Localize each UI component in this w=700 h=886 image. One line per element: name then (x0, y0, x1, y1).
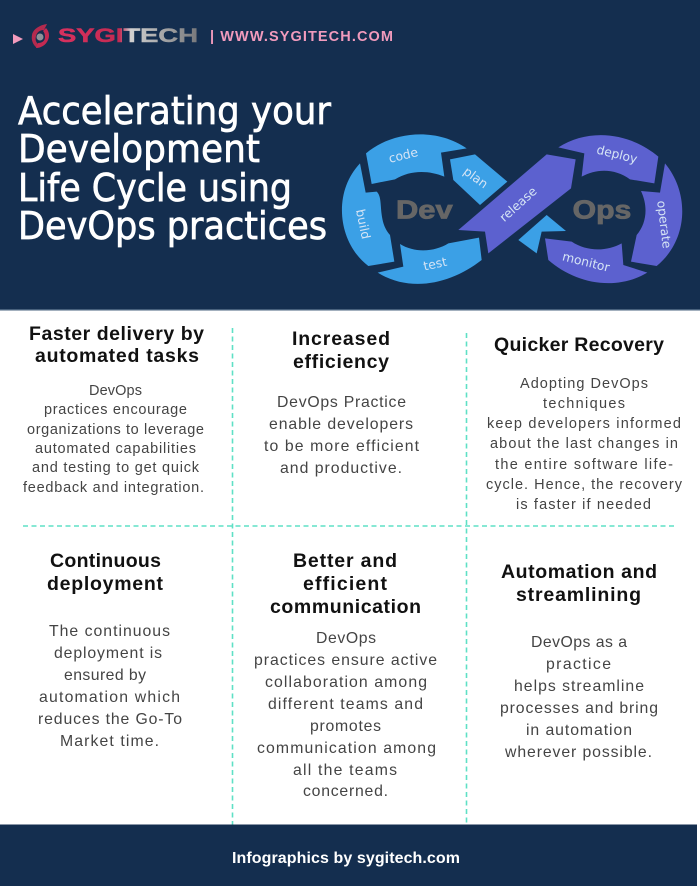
segment: build: build (353, 208, 373, 240)
DevOps infinity diagram (342, 134, 682, 284)
brand bar (13, 24, 393, 48)
panel: automation and streamlining (500, 561, 658, 761)
title: Accelerating your (18, 89, 331, 133)
logo wordmark: SYGITECH (58, 25, 198, 47)
body text: processes and bring (500, 700, 658, 717)
heading: Faster delivery by (29, 323, 204, 345)
heading: automated tasks (35, 345, 199, 367)
body text (23, 383, 204, 496)
heading (29, 323, 204, 367)
panel: better communication (254, 550, 437, 800)
title: Life Cycle using (18, 166, 292, 210)
body text: collaboration among (265, 674, 427, 691)
body text: is faster if needed (516, 497, 651, 513)
grid dividers (23, 328, 676, 825)
panel: quicker recovery (486, 334, 683, 513)
heading: Better and (293, 550, 397, 572)
heading: efficient (303, 573, 388, 595)
body text: ensured by (64, 667, 146, 684)
heading: Automation and (501, 561, 657, 583)
body text: practice (546, 656, 611, 673)
body text: all the teams (293, 762, 397, 779)
segment: plan (450, 154, 507, 205)
heading (270, 550, 421, 618)
title: Development (18, 127, 260, 171)
segment: monitor: monitor (561, 249, 612, 275)
body text: enable developers (269, 416, 413, 433)
body text: and testing to get quick (32, 460, 200, 476)
segment: monitor (545, 238, 647, 283)
body text: DevOps Practice (277, 394, 406, 411)
heading (47, 550, 164, 595)
body text: Market time. (60, 733, 159, 750)
heading: Quicker Recovery (494, 334, 664, 356)
body text: concerned. (303, 783, 388, 800)
body text (38, 623, 182, 750)
body text: about the last changes in (490, 436, 678, 452)
body text: The continuous (49, 623, 170, 640)
panel: faster delivery (23, 323, 204, 496)
body text: organizations to leverage (27, 422, 204, 438)
title: DevOps practices (18, 204, 327, 248)
segment: release arrow (458, 154, 576, 253)
website url: | WWW.SYGITECH.COM (210, 29, 393, 45)
body text (264, 394, 420, 477)
body text: DevOps (316, 630, 376, 647)
header panel (0, 0, 700, 310)
segment: return arrowhead (518, 215, 566, 253)
body text: different teams and (268, 696, 423, 713)
segment: plan: plan (461, 164, 491, 191)
body text: communication among (257, 740, 436, 757)
body text: practices encourage (44, 402, 187, 418)
body text: in automation (526, 722, 632, 739)
body text: automated capabilities (35, 441, 196, 457)
body text: wherever possible. (504, 744, 652, 761)
segment: operate: operate (654, 200, 674, 249)
body text (500, 634, 658, 761)
body text: techniques (543, 396, 625, 412)
icon: logo swirl (32, 24, 49, 48)
heading: Increased (292, 328, 390, 350)
panel: continuous deployment (38, 550, 182, 750)
body text: feedback and integration. (23, 480, 204, 496)
body text: Adopting DevOps (520, 376, 648, 392)
segment: test: test (422, 255, 448, 273)
body text: keep developers informed (487, 416, 681, 432)
body text: practices ensure active (254, 652, 437, 669)
body text: helps streamline (514, 678, 644, 695)
segment: code: code (387, 145, 419, 166)
body text: the entire software life- (495, 457, 673, 473)
icon: pink triangle (13, 34, 23, 44)
footer text: Infographics by sygitech.com (232, 850, 460, 867)
body text: deployment is (54, 645, 162, 662)
segment: code (366, 134, 467, 184)
label: Ops: Ops (573, 194, 631, 224)
heading: communication (270, 596, 421, 618)
segment: deploy (558, 135, 658, 183)
body text: promotes (310, 718, 381, 735)
segment: deploy: deploy (595, 143, 639, 166)
title (18, 89, 331, 248)
segment: test (378, 238, 482, 284)
heading: Continuous (50, 550, 161, 572)
body text: cycle. Hence, the recovery (486, 477, 683, 493)
footer (0, 824, 697, 886)
body text: reduces the Go-To (38, 711, 182, 728)
body text: DevOps as a (531, 634, 627, 651)
segment: build (342, 163, 394, 266)
heading (501, 561, 657, 606)
segment: operate (631, 163, 682, 266)
segment: release arrow: release (497, 184, 540, 225)
body text (486, 376, 683, 513)
heading: deployment (47, 573, 164, 595)
panel: increased efficiency (264, 328, 420, 477)
body text (254, 630, 437, 800)
body text: and productive. (280, 460, 402, 477)
heading: streamlining (516, 584, 641, 606)
body text: automation which (39, 689, 180, 706)
body text: DevOps (89, 383, 142, 399)
heading (292, 328, 390, 373)
heading: efficiency (293, 351, 389, 373)
body text: to be more efficient (264, 438, 420, 455)
label: Dev: Dev (396, 194, 453, 224)
